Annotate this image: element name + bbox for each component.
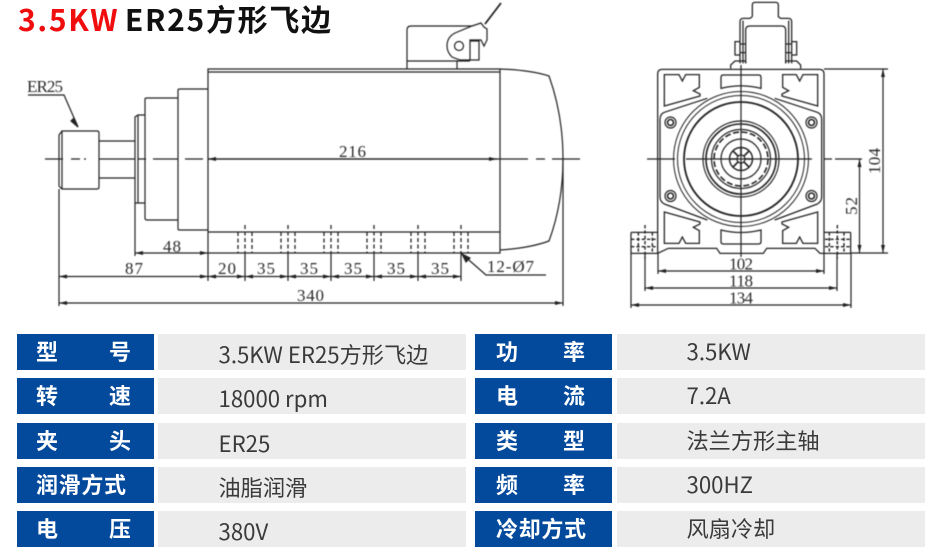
label: 润滑方式: [17, 467, 154, 503]
side view dimensions: 216: [339, 142, 366, 161]
label: 功率: [475, 334, 612, 370]
side view of spindle: [45, 3, 580, 253]
label: 冷却方式: 式: [564, 512, 586, 544]
label: 夹头: [17, 423, 154, 459]
side view dimensions: 20: [218, 259, 236, 278]
front view dimensions: 134: [729, 288, 754, 308]
technical drawings: [27, 0, 889, 309]
label: 电压: 压: [109, 512, 131, 544]
side view dimensions: 35: [344, 259, 362, 278]
label: 电压: [17, 511, 154, 547]
label: 电流: [475, 378, 612, 414]
label: 冷却方式: 方: [541, 512, 563, 544]
label: 频率: 频: [496, 468, 518, 500]
housing windows: [664, 75, 818, 244]
front view dimensions: 52: [842, 197, 861, 215]
label: 型号: 型: [36, 335, 58, 367]
label: 型号: [17, 334, 154, 370]
side view dimensions: 35: [387, 259, 405, 278]
fan cover: [500, 69, 563, 250]
front view dimensions: 102: [729, 254, 753, 274]
side view dimensions: 35: [257, 259, 275, 278]
side view dimensions: 12-Ø7: [487, 257, 534, 276]
label: 频率: [475, 467, 612, 503]
label: 冷却方式: 却: [519, 512, 541, 544]
label: 电流: 电: [496, 379, 518, 411]
value: 润滑方式: 油脂润滑: [218, 471, 307, 503]
label: 类型: 型: [563, 424, 585, 456]
label: 转速: [17, 378, 154, 414]
front view dimensions: 104: [865, 148, 884, 174]
label: 转速: 转: [36, 379, 58, 411]
front flange steps: [135, 89, 208, 230]
value: 电流: [617, 378, 925, 414]
value: 功率: 3.5KW: [686, 335, 751, 367]
front center lines: [647, 65, 862, 257]
value: 夹头: [158, 423, 466, 459]
screws: [665, 117, 817, 202]
value: 型号: [158, 334, 466, 370]
side view dimensions: 340: [297, 286, 324, 305]
front view of spindle: [631, 2, 862, 258]
label: 润滑方式: 方: [81, 468, 103, 500]
value: 润滑方式: [158, 467, 466, 503]
side view dimensions: 87: [125, 259, 144, 278]
label: 功率: 率: [563, 335, 585, 367]
value: 电压: [158, 511, 466, 547]
front view dimensions: 118: [729, 272, 753, 290]
label: 转速: 速: [109, 379, 131, 411]
value: 频率: [617, 467, 925, 503]
center line: [45, 158, 580, 160]
side view dimensions: 35: [431, 259, 449, 278]
ER25 callout: ER25: [27, 77, 63, 96]
value: 转速: [158, 378, 466, 414]
concentric spindle face: [674, 92, 808, 226]
label: 类型: 类: [496, 424, 518, 456]
label: 频率: 率: [563, 468, 585, 500]
label: 润滑方式: 滑: [59, 468, 81, 500]
value: 转速: 18000 rpm: [218, 382, 328, 414]
label: 夹头: 夹: [36, 424, 58, 456]
spec table: [17, 334, 925, 547]
mounting holes: [238, 225, 468, 253]
value: 功率: [617, 334, 925, 370]
value: 类型: 法兰方形主轴: [686, 424, 820, 456]
label: 冷却方式: 冷: [496, 512, 518, 544]
value: 冷却方式: 风扇冷却: [686, 512, 775, 544]
side view dimensions: 48: [163, 237, 181, 256]
shaft: [99, 141, 135, 178]
label: 电压: 电: [36, 512, 58, 544]
value: 冷却方式: [617, 511, 925, 547]
label: 功率: 功: [496, 335, 518, 367]
side view dimensions: [59, 142, 563, 306]
housing: [631, 69, 851, 258]
label: 类型: [475, 423, 612, 459]
value: 频率: 300HZ: [686, 468, 753, 500]
terminal connector: [731, 2, 801, 69]
value: 类型: [617, 423, 925, 459]
label: 型号: 号: [109, 335, 131, 367]
label: 润滑方式: 式: [104, 468, 126, 500]
value: 电压: 380V: [218, 515, 268, 547]
side view dimensions: 35: [300, 259, 318, 278]
label: 冷却方式: [475, 511, 612, 547]
motor body: [208, 69, 500, 253]
front view dimensions: [631, 69, 888, 308]
ER25 callout: [27, 77, 78, 127]
value: 电流: 7.2A: [686, 379, 731, 411]
base holes: [631, 225, 851, 258]
label: 润滑方式: 润: [36, 468, 58, 500]
ER25 nut: [59, 131, 99, 189]
terminal box: [407, 3, 501, 69]
value: 夹头: ER25: [218, 427, 270, 459]
plate outline: [660, 98, 822, 220]
label: 夹头: 头: [109, 424, 131, 456]
value: 型号: 3.5KW ER25方形飞边: [218, 338, 428, 370]
label: 电流: 流: [563, 379, 585, 411]
